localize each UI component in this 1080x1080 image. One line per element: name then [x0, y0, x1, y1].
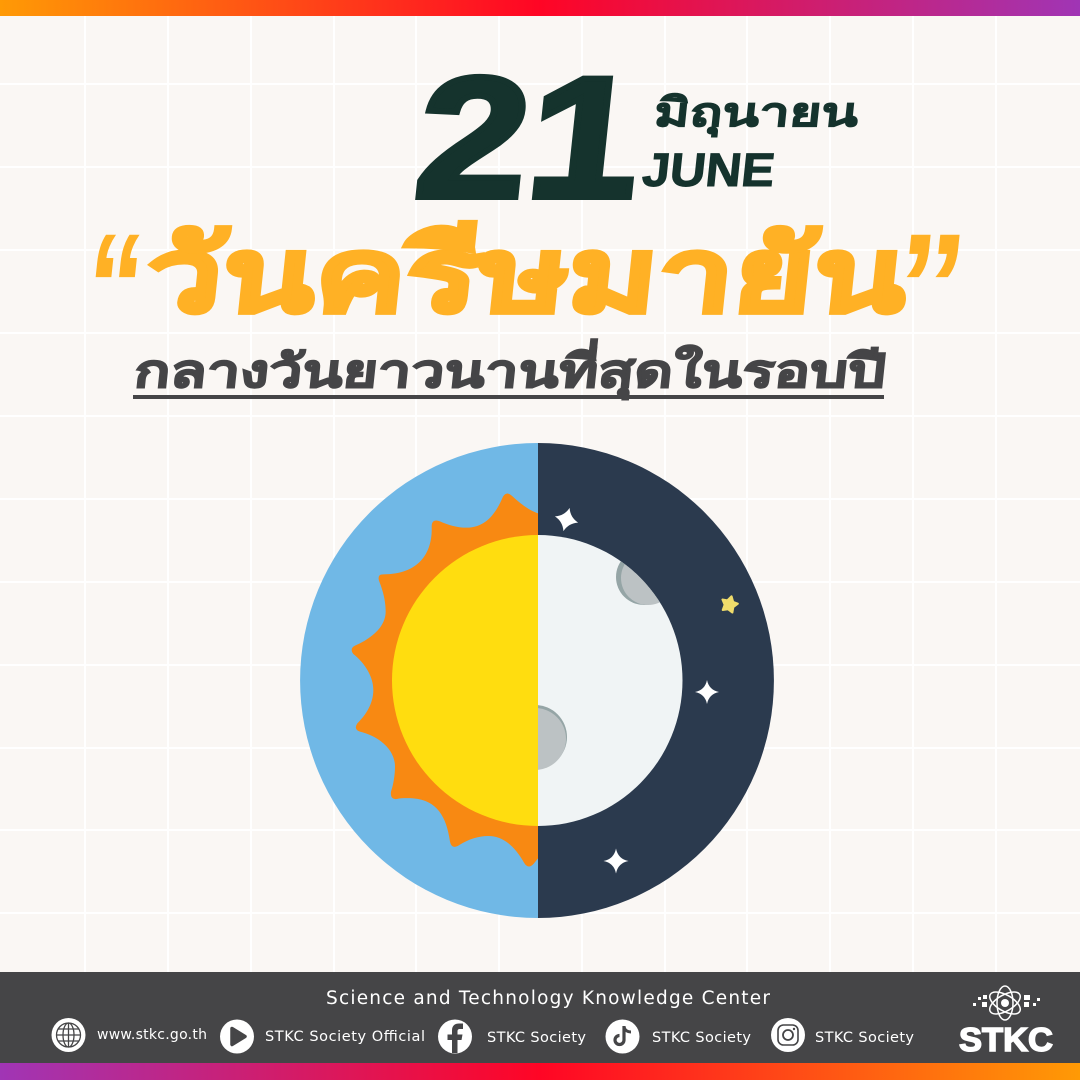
- icon: globe: [52, 1018, 86, 1052]
- footer panel: [0, 972, 1080, 1063]
- website text: www.stkc.go.th: [97, 1027, 207, 1043]
- instagram text: STKC Society: [815, 1030, 914, 1046]
- sun disc: [392, 535, 538, 826]
- subtitle with underline: กลางวันยาวนานที่สุดในรอบปี: [132, 338, 889, 400]
- subtitle with underline: [132, 338, 889, 400]
- yellow star: [720, 594, 739, 613]
- moon disc: [538, 535, 683, 826]
- logo atom mark: [973, 986, 1040, 1020]
- icon: tiktok: [606, 1020, 640, 1054]
- icon: play: [220, 1020, 254, 1054]
- title: summer solstice day: “: [78, 202, 151, 370]
- day half sky: [300, 443, 538, 918]
- moon craters: [538, 562, 660, 770]
- star top: [552, 505, 581, 534]
- title: summer solstice day: ”: [887, 202, 973, 370]
- sun rays: [352, 494, 538, 867]
- star right: [695, 680, 719, 704]
- logo: STKC: [959, 986, 1053, 1058]
- bottom gradient bar: [0, 1063, 1080, 1080]
- tiktok text: STKC Society: [652, 1030, 751, 1046]
- footer heading: Science and Technology Knowledge Center: [326, 988, 770, 1009]
- icon: facebook: [438, 1020, 472, 1054]
- title: summer solstice day: [78, 202, 973, 370]
- title: summer solstice day: วันครีษมายัน: [141, 218, 913, 333]
- heading: JUNE: JUNE: [640, 143, 778, 196]
- night half sky: [538, 443, 774, 918]
- icon: instagram: [771, 1018, 805, 1052]
- top gradient bar: [0, 0, 1080, 16]
- facebook text: STKC Society: [487, 1030, 586, 1046]
- youtube text: STKC Society Official: [265, 1029, 425, 1045]
- star bottom: [604, 848, 628, 874]
- illustration: day and night circle: [300, 443, 774, 918]
- heading: date 21: 21: [408, 41, 650, 234]
- heading: Thai month: มิถุนายน: [652, 91, 861, 138]
- logo wordmark: STKC: [959, 1021, 1053, 1058]
